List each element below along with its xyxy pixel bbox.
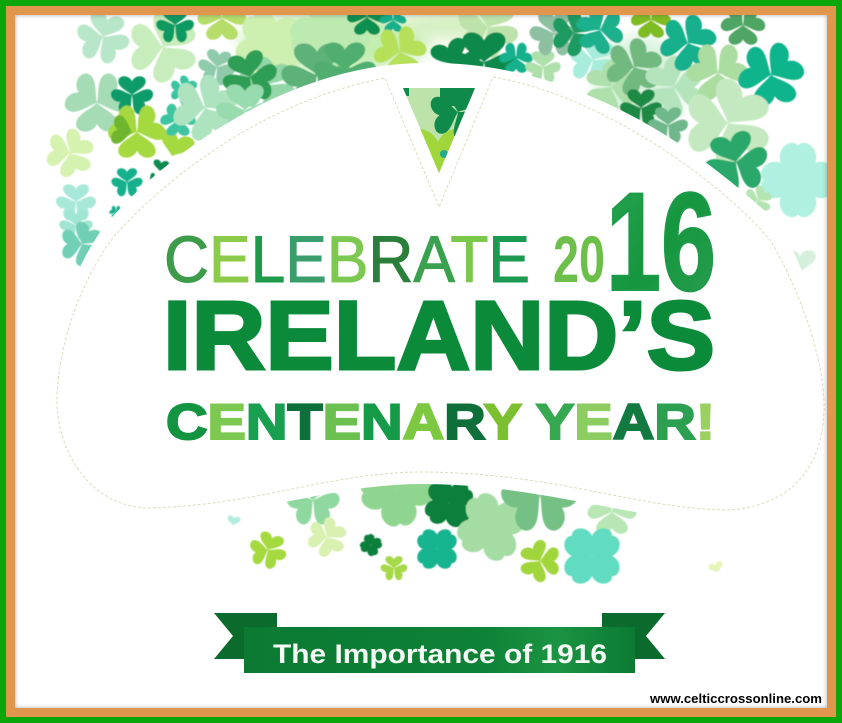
celebrate word: CELEBRATE: [164, 222, 530, 296]
ribbon banner: [214, 613, 665, 673]
left ribbon tail: [214, 613, 277, 659]
year digits 16: 16: [606, 163, 716, 320]
white dome panel: [45, 63, 836, 522]
top shamrock cluster: [34, 0, 842, 275]
right ribbon tail: [602, 613, 665, 659]
ribbon band: [244, 627, 635, 673]
year digits 20: 20: [553, 222, 605, 296]
headline: celebrate 2016: [164, 163, 716, 320]
banner title: The Importance of 1916: [273, 639, 607, 669]
notch triangle with shamrocks: [403, 88, 475, 173]
headline: Ireland's: IRELAND’S: [163, 281, 715, 390]
website credit: www.celticcrossonline.com: [649, 692, 822, 706]
headline: centenary year: CENTENARY YEAR!: [166, 394, 715, 450]
bottom shamrock cluster: [227, 444, 725, 591]
dashed dome outline: [57, 77, 824, 510]
